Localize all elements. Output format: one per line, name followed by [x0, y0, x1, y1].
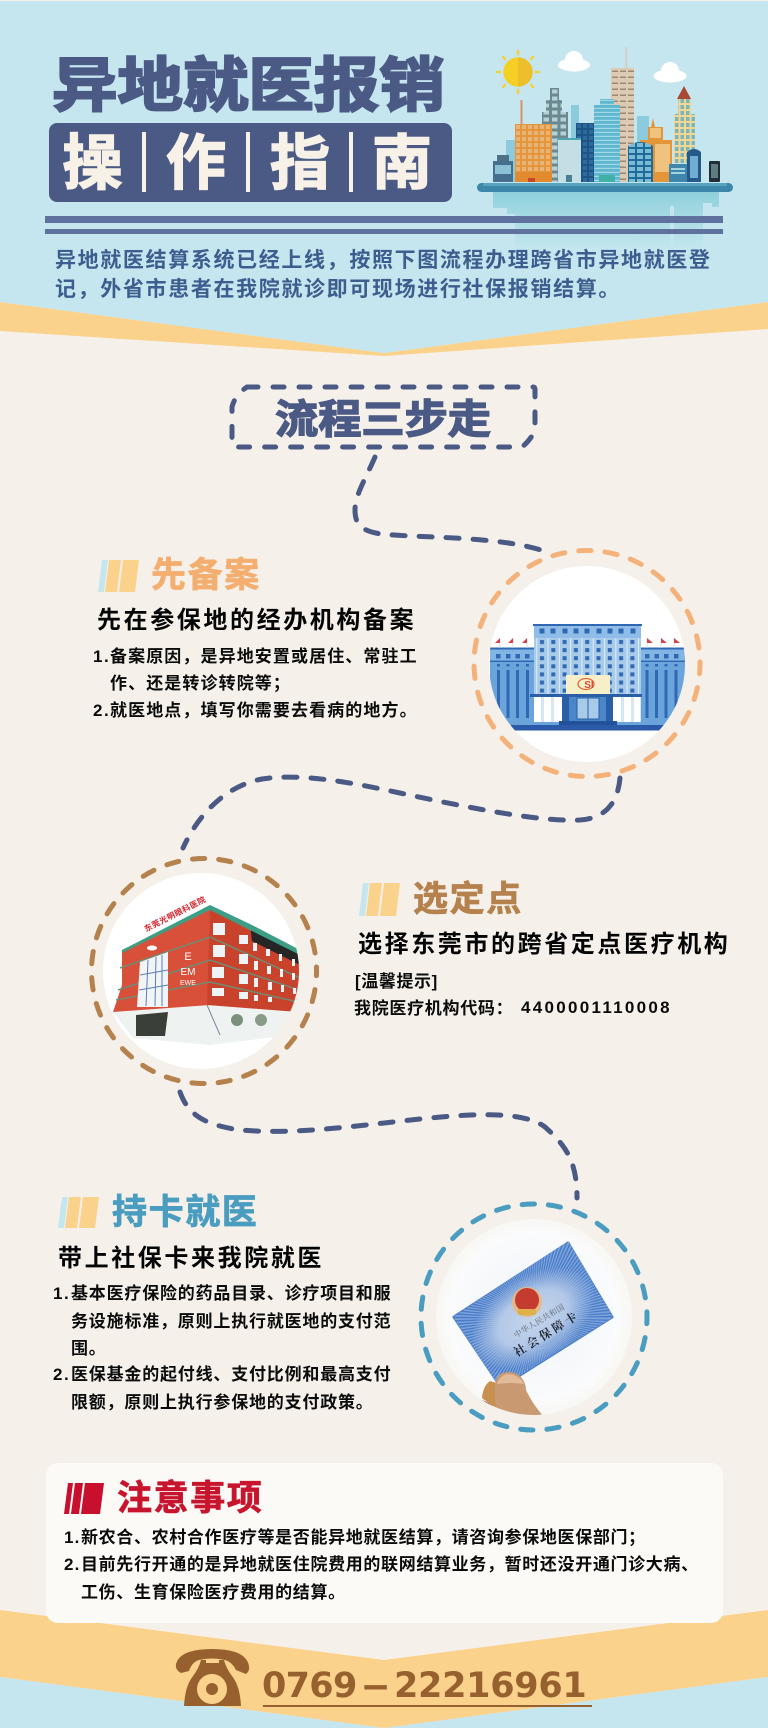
decorative double bars: [45, 216, 723, 234]
phone number: 0769: [262, 1666, 357, 1706]
left wing: [490, 648, 534, 722]
icon: heading stripes: [58, 1197, 99, 1228]
section title: 流程三步走: 流程三步走: [275, 396, 491, 442]
fingers behind card: [482, 1381, 500, 1412]
heading: 注意事项: [117, 1479, 263, 1518]
card: [454, 1243, 612, 1387]
city platform: [477, 183, 733, 192]
list: 目前先行开通的是异地就医住院费用的联网结算业务，暂时还没开通门诊大病、: [81, 1554, 699, 1574]
tip text: [温馨提示]: [355, 972, 438, 991]
subheading: 先在参保地的经办机构备案: [97, 606, 416, 634]
icon: heading stripes: [359, 883, 400, 916]
heading: 持卡就医: [112, 1193, 258, 1232]
subheading: 选择东莞市的跨省定点医疗机构: [358, 931, 730, 958]
icon: hospital building in dashed circle: 东莞光明眼科医院: [142, 894, 207, 934]
tower: [534, 638, 641, 695]
title box: 操作指南: 指: [270, 130, 330, 197]
list: 围。: [71, 1339, 107, 1358]
list: 新农合、农村合作医疗等是否能异地就医结算，请咨询参保地医保部门；: [81, 1527, 646, 1547]
icon: telephone: [176, 1649, 249, 1706]
list: 1.: [93, 647, 110, 666]
icon: clouds: [558, 51, 686, 82]
icon: social security card in dashed circle: 中华人民共和国: [512, 1302, 567, 1341]
list: 工伤、生育保险医疗费用的结算。: [81, 1582, 346, 1602]
panel: step 3 持卡就医: [53, 1193, 391, 1412]
icon: hospital building in dashed circle: EWE: [180, 980, 196, 987]
list: [53, 1283, 391, 1412]
phone number: [262, 1666, 592, 1707]
list: 基本医疗保险的药品目录、诊疗项目和服: [71, 1283, 391, 1303]
tip text: 我院医疗机构代码：: [354, 998, 513, 1018]
buildings: [493, 47, 720, 182]
list: 1.: [53, 1284, 70, 1303]
list: 作、还是转诊转院等；: [110, 673, 291, 693]
arrow: dashed connector to step 3: [180, 1092, 577, 1198]
title box: 操作指南: [49, 123, 452, 202]
subheading: 带上社保卡来我院就医: [58, 1244, 324, 1272]
section title: 流程三步走: [232, 387, 535, 447]
icon: government building in dashed circle: [474, 550, 700, 776]
list: 2.: [64, 1555, 81, 1574]
tip text: [354, 972, 672, 1018]
title: 异地就医报销: 异地就医报销: [52, 54, 445, 119]
list: 备案原因，是异地安置或居住、常驻工: [110, 646, 418, 666]
bottom footer background with chevron: [0, 1610, 768, 1728]
city reflection: [493, 192, 719, 250]
panel: notes 注意事项: [46, 1463, 723, 1623]
top header background with chevron: [0, 1, 768, 356]
emblem: [512, 1287, 542, 1317]
arrow: dashed connector to step 1: [355, 457, 544, 551]
title box: 操作指南: 操: [62, 130, 122, 197]
icon: social security card in dashed circle: 社会保障卡: [510, 1306, 583, 1360]
panel: step 2 选定点: [354, 880, 730, 1018]
intro text: 异地就医结算系统已经上线，按照下图流程办理跨省市异地就医登: [55, 248, 712, 272]
heading: 先备案: [151, 556, 261, 595]
list: 限额，原则上执行参保地的支付政策。: [71, 1392, 374, 1412]
list: 2.: [93, 701, 110, 720]
list: [64, 1527, 699, 1602]
title box: 操作指南: 南: [372, 130, 432, 197]
list: 务设施标准，原则上执行就医地的支付范: [71, 1311, 391, 1331]
list: 1.: [64, 1528, 81, 1547]
intro text: [55, 248, 712, 301]
phone number: 22216961: [394, 1666, 586, 1706]
icon: heading stripes: [98, 560, 139, 592]
list: [93, 646, 418, 720]
phone number: —: [363, 1666, 388, 1706]
cityscape illustration: [477, 47, 733, 250]
hand thumb: [482, 1372, 542, 1415]
tip text: 4400001110008: [521, 998, 672, 1017]
icon: hospital building in dashed circle: E: [184, 951, 192, 963]
intro text: 记，外省市患者在我院就诊即可现场进行社保报销结算。: [55, 277, 621, 301]
title box: 操作指南: 作: [166, 130, 226, 197]
icon: social security card in dashed circle: [421, 1204, 647, 1430]
icon: sun: [497, 51, 539, 93]
right wing: [640, 648, 685, 722]
flags: [500, 638, 674, 648]
list: 就医地点，填写你需要去看病的地方。: [110, 700, 418, 720]
list: 2.: [53, 1365, 70, 1384]
arrow: dashed connector to step 2: [183, 777, 620, 848]
entrance: [541, 697, 641, 722]
list: 医保基金的起付线、支付比例和最高支付: [71, 1364, 391, 1384]
sign: [566, 675, 610, 694]
icon: hospital building in dashed circle: EM: [180, 967, 196, 978]
panel: step 1 先备案: [93, 556, 418, 720]
icon: hospital building in dashed circle: [92, 858, 316, 1084]
icon: government building in dashed circle: SI: [584, 680, 594, 691]
icon: red stripes: [64, 1483, 104, 1514]
heading: 选定点: [413, 880, 523, 919]
